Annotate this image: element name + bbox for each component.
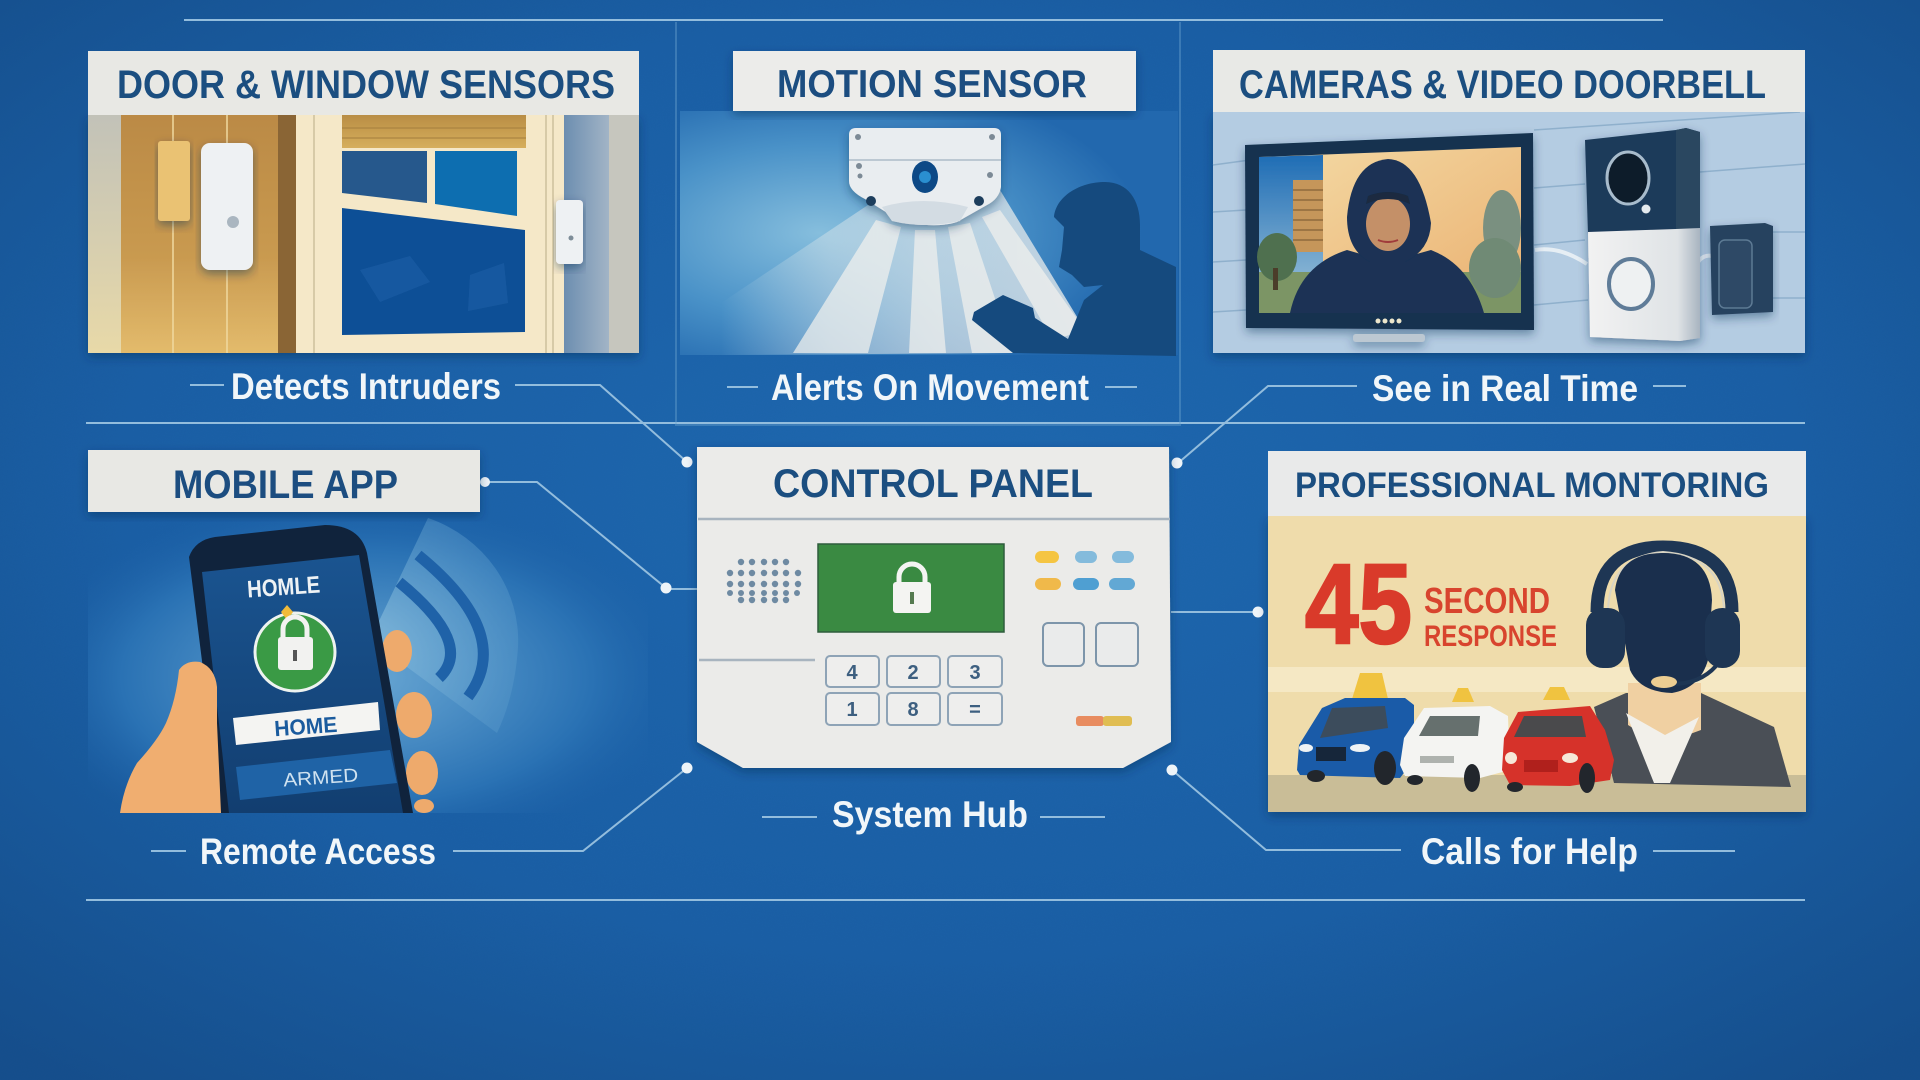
silhouette: person with device xyxy=(972,182,1176,356)
frame lines xyxy=(86,20,1805,900)
panel: cameras and video doorbell xyxy=(1213,50,1805,409)
phone xyxy=(189,525,413,813)
keypad: 4 xyxy=(846,662,858,684)
operator with headset xyxy=(1586,547,1791,787)
phone armed band: ARMED xyxy=(283,765,359,791)
phone home button xyxy=(233,702,380,745)
icon: ceiling motion sensor xyxy=(849,128,1001,225)
heading: mobile app: MOBILE APP xyxy=(173,463,398,507)
connector dots xyxy=(480,456,1264,776)
panel: motion sensor xyxy=(680,51,1178,408)
keypad xyxy=(826,656,1002,725)
keypad: 2 xyxy=(907,662,919,684)
panel: door and window sensors xyxy=(88,51,639,407)
caption: system hub: System Hub xyxy=(832,794,1028,835)
keypad: 1 xyxy=(846,699,858,721)
vehicle: blue car xyxy=(1297,673,1414,785)
heading: professional monitoring xyxy=(1268,451,1806,516)
caption: see in real time: See in Real Time xyxy=(1372,368,1638,409)
square buttons xyxy=(1043,623,1138,666)
stat: 45 second response: 45 xyxy=(1305,541,1412,667)
hand thumb xyxy=(120,662,221,813)
phone armed band xyxy=(236,750,397,800)
panel: control panel xyxy=(697,447,1171,835)
status screen with lock xyxy=(818,544,1004,632)
panel: professional monitoring xyxy=(1268,451,1806,872)
connector lines xyxy=(151,385,1735,851)
caption: alerts on movement: Alerts On Movement xyxy=(771,367,1089,408)
caption: remote access: Remote Access xyxy=(200,831,436,872)
heading: motion sensor xyxy=(733,51,1136,111)
heading: control panel: CONTROL PANEL xyxy=(773,462,1093,506)
panel: mobile app xyxy=(88,450,648,872)
icon: window sensor xyxy=(556,200,583,264)
caption: calls for help: Calls for Help xyxy=(1421,831,1638,872)
icon: door chime box xyxy=(1710,223,1773,315)
icon: lock badge xyxy=(255,605,335,691)
panel body xyxy=(697,447,1171,768)
heading: door and window sensors xyxy=(88,51,639,115)
icon: door contact magnet xyxy=(158,141,190,221)
heading: professional monitoring: PROFESSIONAL MONTORING xyxy=(1295,466,1769,505)
wall background xyxy=(1213,112,1805,353)
icon: door contact sensor xyxy=(201,143,253,270)
monitoring scene background xyxy=(1268,516,1806,812)
heading: cameras and video doorbell xyxy=(1213,50,1805,112)
heading: mobile app xyxy=(88,450,480,512)
stat: 45 second response: RESPONSE xyxy=(1424,620,1557,653)
stat: 45 second response xyxy=(1305,541,1557,667)
phone title: HOMLE xyxy=(246,571,321,603)
cable xyxy=(1535,249,1712,264)
keypad: 8 xyxy=(907,699,919,721)
vehicle: red car xyxy=(1502,687,1614,793)
heading: cameras and video doorbell: CAMERAS & VIDEO DOORBELL xyxy=(1239,63,1766,107)
monitor xyxy=(1245,133,1534,342)
motion sensor scene xyxy=(680,111,1178,355)
glow background xyxy=(88,512,648,813)
signal waves xyxy=(370,518,518,733)
vehicle: white van xyxy=(1400,688,1510,792)
heading: motion sensor: MOTION SENSOR xyxy=(777,63,1087,106)
motion beam xyxy=(721,190,1085,355)
caption: detects intruders: Detects Intruders xyxy=(231,366,501,407)
icon: video doorbell xyxy=(1585,128,1700,341)
indicator lights xyxy=(1035,551,1135,590)
door and window illustration xyxy=(88,115,639,353)
keypad: 3 xyxy=(969,662,981,684)
hand fingers xyxy=(382,630,438,813)
speaker grille xyxy=(727,559,801,603)
phone home button: HOME xyxy=(273,712,338,741)
stat: 45 second response: SECOND xyxy=(1424,580,1550,621)
keypad: = xyxy=(969,699,981,721)
heading: door and window sensors: DOOR & WINDOW SENSORS xyxy=(117,63,615,107)
status bar xyxy=(1076,716,1132,726)
